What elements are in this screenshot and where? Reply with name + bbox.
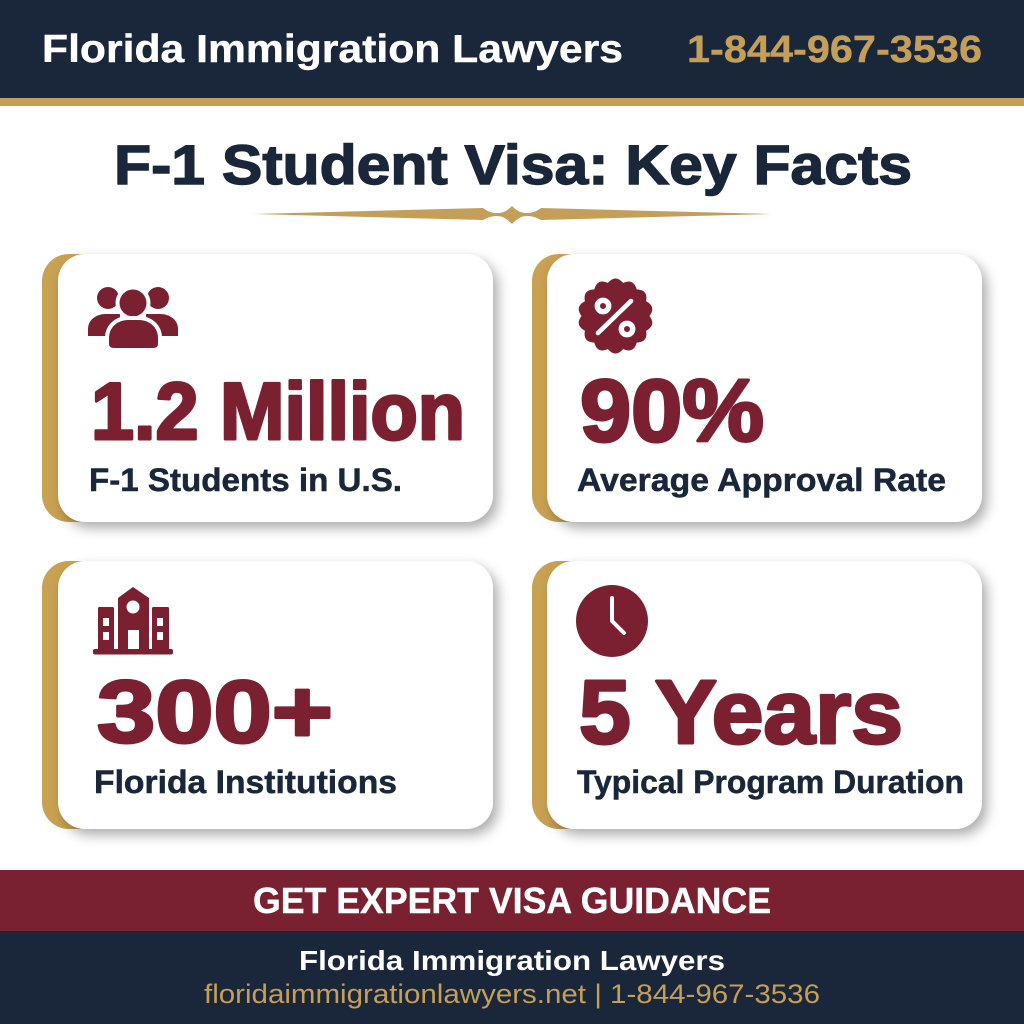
- label: F-1 Students in U.S.: [89, 462, 402, 498]
- label: Typical Program Duration: [577, 764, 964, 800]
- firm name: Florida Immigration Lawyers: [42, 28, 623, 71]
- stat: 300+: [97, 662, 333, 761]
- label: Florida Institutions: [94, 764, 397, 800]
- call to action band: [0, 870, 1024, 931]
- label: Average Approval Rate: [577, 462, 946, 498]
- stat: 5 Years: [579, 663, 903, 763]
- panel: approval rate: [532, 254, 982, 522]
- footer contact line: floridaimmigrationlawyers.net | 1-844-967-3536: [204, 979, 820, 1009]
- icon: clock: [576, 585, 648, 657]
- stat: 1.2 Million: [91, 367, 465, 457]
- icon: people: [88, 286, 178, 348]
- panel: students: [42, 254, 493, 522]
- title: F-1 Student Visa: Key Facts: [114, 133, 912, 196]
- stat: 90%: [580, 361, 764, 460]
- icon: campus building: [93, 587, 173, 654]
- title ornament: [252, 206, 772, 224]
- header bar: [0, 0, 1024, 106]
- panel: program duration: [532, 561, 982, 829]
- panel: institutions: [42, 561, 493, 829]
- call to action text: GET EXPERT VISA GUIDANCE: [253, 880, 771, 921]
- footer: [0, 931, 1024, 1024]
- footer firm name: Florida Immigration Lawyers: [299, 945, 725, 976]
- icon: percent badge: [579, 278, 652, 354]
- header phone number: 1-844-967-3536: [687, 29, 982, 71]
